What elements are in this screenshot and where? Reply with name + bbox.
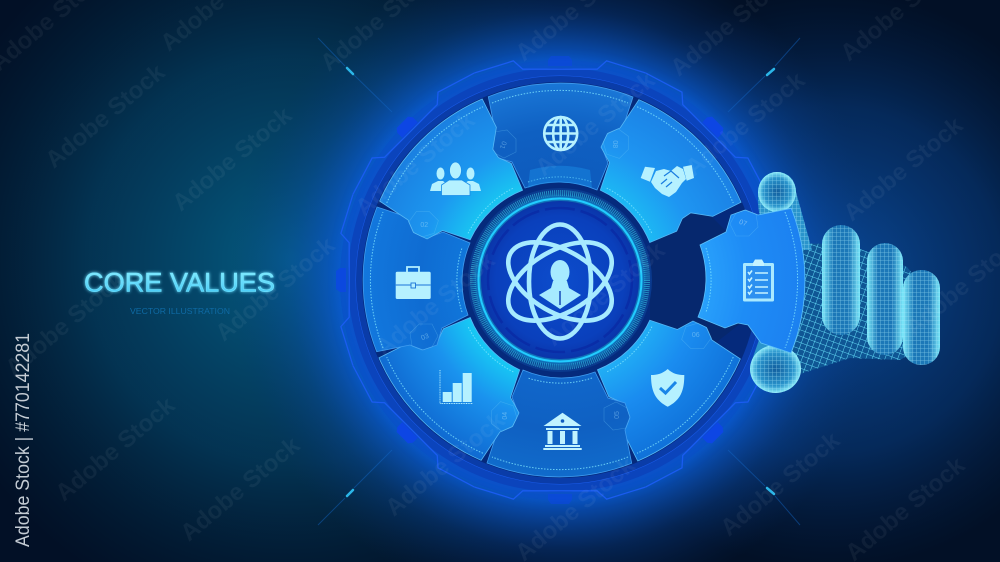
segment 06 south-east (572, 293, 750, 471)
segment 02 north-west: 02 (420, 222, 428, 229)
gear ring (336, 56, 780, 504)
finger 3 (903, 270, 940, 365)
index finger (758, 172, 812, 250)
watermark: Adobe Stock (838, 111, 969, 227)
finger 1 (822, 225, 860, 335)
thumb (750, 337, 801, 393)
segment 04 south-west (369, 292, 547, 470)
hand wireframe (750, 172, 940, 393)
icon: briefcase (396, 267, 431, 299)
outer glow (345, 65, 775, 495)
icon: team of people (430, 162, 481, 196)
segment 02 north-west (370, 89, 548, 267)
watermark: Adobe Stock (0, 266, 131, 382)
palm (770, 243, 930, 374)
segment 01 top: 01 (498, 140, 507, 150)
corner dash markers (347, 68, 774, 496)
segment 06 south-east: 06 (692, 332, 700, 339)
segment 05 bottom (487, 370, 632, 477)
watermark: Adobe Stock (350, 106, 481, 222)
segment 07 east, pulled out by the hand (698, 208, 805, 353)
watermark: Adobe Stock (540, 236, 671, 352)
title: core values: CORE VALUES (84, 268, 275, 298)
icon: handshake (641, 165, 694, 197)
watermark: Adobe Stock (680, 66, 811, 182)
icon: clipboard (743, 260, 774, 302)
segment 03 west: 03 (420, 333, 430, 342)
segment 01 top (488, 83, 633, 190)
icon: bar chart (440, 370, 473, 404)
segment 03 west (363, 207, 470, 352)
icon: bank building (543, 413, 582, 450)
segment 08 north-east (573, 90, 751, 268)
watermark: Adobe Stock (50, 391, 181, 507)
segment 07 east, pulled out by the hand: 07 (738, 219, 748, 228)
watermark: Adobe Stock (175, 431, 306, 547)
watermark: Adobe Stock (210, 231, 341, 347)
wheel (336, 56, 940, 504)
finger 2 (867, 243, 903, 355)
icon: globe (544, 117, 577, 150)
corner connector lines (318, 38, 800, 525)
watermark: Adobe Stock (167, 101, 298, 217)
dark area behind removed segment (650, 205, 745, 355)
icon: shield with check (651, 369, 684, 407)
central hub (468, 188, 652, 372)
vertical stock id label: Adobe Stock | #770142281 (12, 333, 34, 547)
segment 08 north-east: 08 (611, 140, 618, 148)
watermark: Adobe Stock (370, 246, 501, 362)
watermark: Adobe Stock (380, 406, 511, 522)
segment 05 bottom: 05 (614, 411, 621, 419)
segment 04 south-west: 04 (502, 412, 509, 420)
watermark: Adobe Stock (40, 58, 171, 174)
icon: atom with person (495, 224, 625, 338)
watermark: Adobe Stock (530, 66, 661, 182)
watermark: Adobe Stock (715, 426, 846, 542)
subtitle: VECTOR ILLUSTRATION (130, 307, 230, 316)
